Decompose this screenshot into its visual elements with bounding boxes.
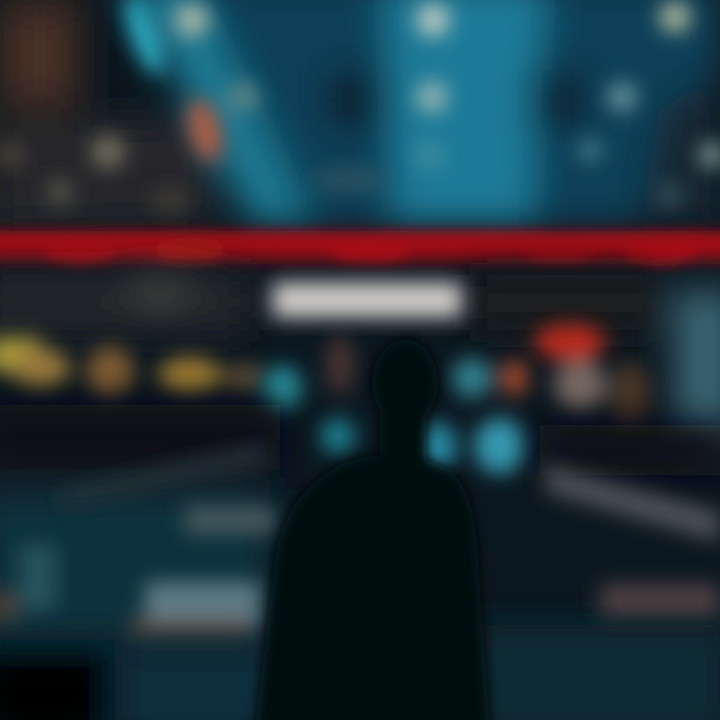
red band <box>0 231 720 266</box>
head <box>372 339 438 427</box>
silhouette: person from behind <box>255 339 490 720</box>
desks and lower floor <box>0 405 720 720</box>
background: upper screen wall <box>0 0 720 230</box>
neck <box>380 415 426 465</box>
yellow lights left <box>0 338 265 398</box>
teal and orange lights <box>262 324 650 474</box>
mid-level dark strip <box>0 275 720 440</box>
white sign <box>272 282 462 318</box>
torso <box>255 455 490 720</box>
ceiling lights <box>0 0 720 212</box>
